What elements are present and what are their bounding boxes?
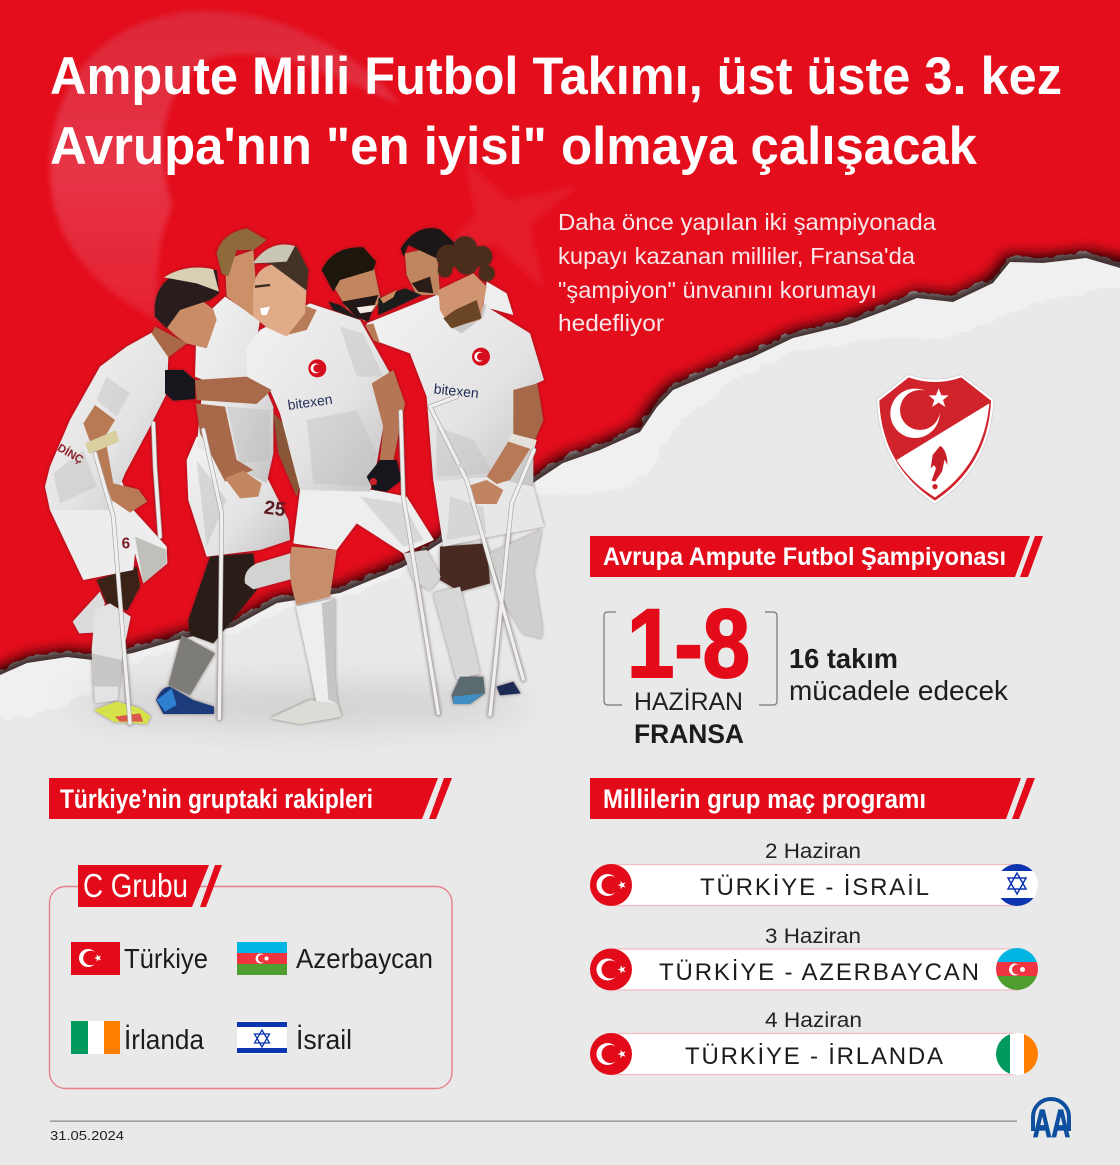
agency logo [1033,1099,1070,1146]
player 6: bitexen [433,380,480,401]
player 1: 6 [122,535,130,552]
match 1: TÜRKİYE - İSRAİL [700,874,929,901]
label: İsrail: İsrail [296,1024,352,1055]
torn paper edge [0,250,1120,717]
federation crest [877,374,994,504]
match 3 [590,1009,1038,1075]
crutches [95,397,534,723]
date numbers: 1-8 [627,589,750,698]
intro text: hedefliyor [558,310,664,336]
banner: championship [590,536,1043,577]
match 3: 4 Haziran [765,1009,862,1032]
player 2 [156,228,302,714]
dates block [604,589,777,749]
intro text: "şampiyon" ünvanını korumayı [558,277,877,303]
label: Türkiye: Türkiye [124,943,208,974]
intro text [558,209,936,336]
flag: İrlanda [71,1021,120,1054]
match 1 [590,840,1038,906]
intro text: Daha önce yapılan iki şampiyonada [558,209,936,235]
match 3: TÜRKİYE - İRLANDA [685,1043,943,1070]
banner: match schedule: Millilerin grup maç programı [603,784,926,814]
player 1: DİNÇ [55,441,86,466]
title [50,47,1062,176]
banner: match schedule [590,778,1035,819]
crutch shadows [95,397,534,723]
label: Azerbaycan: Azerbaycan [296,943,433,974]
flag crescent [50,11,400,325]
title: Avrupa'nın "en iyisi" olmaya çalışacak [50,117,977,176]
player 5 (back) [401,228,513,315]
flag: Azerbaycan [237,942,287,975]
team count text [789,643,1009,706]
footer rule and date: 31.05.2024 [50,1128,124,1143]
team count text: 16 takım [789,643,898,674]
team photo illustration [45,228,544,724]
month: HAZİRAN [634,687,743,716]
match 2 [590,925,1038,991]
flag: İsrail [237,1021,287,1054]
date brackets [604,612,777,705]
panel: group C [50,865,452,1088]
flag: Türkiye [71,942,120,975]
player 3 [165,245,441,724]
banner: rivals [49,778,452,819]
player 4 (back) [322,247,422,322]
label: İrlanda: İrlanda [124,1024,204,1055]
group tab: C Grubu [83,867,188,904]
title: Ampute Milli Futbol Takımı, üst üste 3. kez [50,47,1062,106]
team count text: mücadele edecek [789,675,1009,706]
banner: rivals: Türkiye’nin gruptaki rakipleri [60,784,373,814]
torn dark edge shadow [0,258,1120,690]
red flag background [0,0,1120,690]
location: FRANSA [634,719,744,749]
match 2: TÜRKİYE - AZERBAYCAN [659,959,979,986]
player 2: 25 [263,497,287,521]
player 6 [365,236,544,704]
match 2: 3 Haziran [765,925,861,948]
match 1: 2 Haziran [765,840,861,863]
intro text: kupayı kazanan milliler, Fransa'da [558,243,915,269]
banner: championship: Avrupa Ampute Futbol Şampiyonası [603,543,1006,571]
ground shadow [70,687,530,723]
player 3: bitexen [287,391,333,413]
agency logo: AA [1033,1103,1070,1146]
flag star [454,166,571,284]
player 1 [45,268,219,724]
